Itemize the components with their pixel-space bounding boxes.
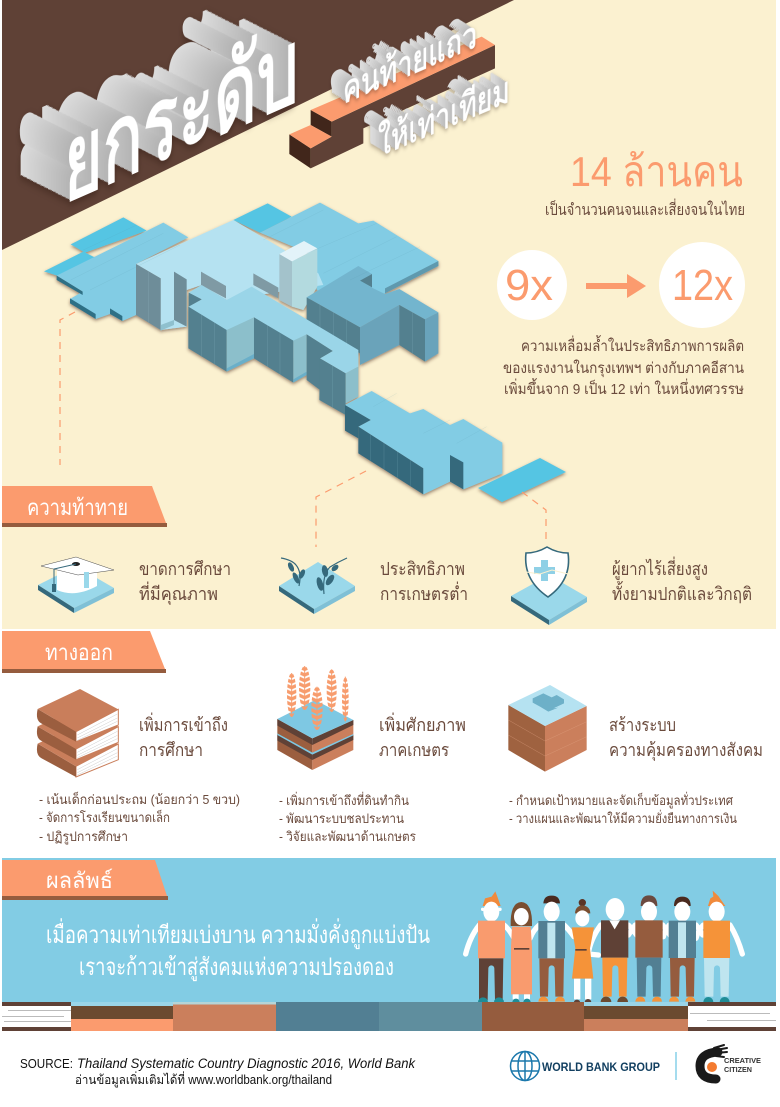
text: lack of quality education: ขาดการศึกษา (139, 559, 231, 579)
bullet list: agriculture: - เพิ่มการเข้าถึงที่ดินทำกิน (279, 792, 409, 808)
logo: World Bank Group: WORLD BANK GROUP (542, 1062, 660, 1074)
results statement: เมื่อความเท่าเทียมเบ่งบาน ความมั่งคั่งถูกแบ่งปัน (46, 918, 430, 950)
person 2 (511, 902, 532, 1002)
bullet list: social protection (509, 791, 737, 826)
bullet list: education (39, 790, 240, 845)
productivity gap text: เพิ่มขึ้นจาก 9 เป็น 12 เท่า ในหนึ่งทศวรรษ (504, 378, 744, 398)
text: increase access to education: เพิ่มการเข้าถึง (139, 712, 228, 735)
person 6 (635, 895, 663, 1002)
banner: challenges (2, 486, 167, 527)
circle: 9x (497, 250, 567, 320)
person 5 (601, 898, 628, 1002)
subtitle line 1, extruded: คนท้ายแถว (343, 13, 477, 113)
text: low agricultural productivity (380, 559, 468, 604)
person 8 (703, 891, 730, 1002)
results statement: เราจะก้าวเข้าสู่สังคมแห่งความปรองดอง (79, 954, 394, 982)
logo divider (676, 1052, 677, 1080)
brown diagonal title background (2, 0, 514, 250)
main title, extruded isometric text: ยกระดับ (64, 6, 299, 226)
bottom colour blocks (2, 1002, 776, 1031)
results panel background (2, 858, 776, 1003)
text: increase access to education: การศึกษา (139, 740, 203, 760)
bullet list: education: - เน้นเด็กก่อนประถม (น้อยกว่า 5 ขวบ) (39, 790, 240, 807)
banner: solutions: ทางออก (45, 640, 113, 665)
subtitle line 2, extruded: ให้เท่าเทียม (378, 68, 510, 166)
text: build social protection system: สร้างระบบ (609, 715, 676, 735)
text: lack of quality education: ที่มีคุณภาพ (139, 581, 218, 605)
source text: SOURCE: (20, 1056, 73, 1071)
bullet list: education: - ปฏิรูปการศึกษา (39, 829, 128, 845)
person 3 (538, 896, 565, 1002)
circle: 12x: 12x (672, 261, 733, 310)
circle: 9x: 9x (505, 261, 553, 310)
bullet list: social protection: - กำหนดเป้าหมายและจัดเก็บข้อมูลทั่วประเทศ (509, 791, 734, 809)
banner: results (2, 860, 168, 900)
logo: Creative Citizen: CREATIVE (724, 1056, 761, 1065)
circle: 12x (659, 242, 745, 328)
icon: cube with medical cross (508, 685, 587, 772)
banner: results: ผลลัพธ์ (46, 868, 113, 893)
source text (20, 1056, 416, 1088)
icon: graduation cap on platform (38, 557, 114, 613)
dashed connector: agriculture (316, 471, 366, 547)
text: lack of quality education (139, 559, 231, 605)
productivity gap text (503, 335, 744, 398)
source text: Thailand Systematic Country Diagnostic 2016, World Bank (77, 1056, 416, 1071)
text: increase agricultural potential: ภาคเกษตร (379, 740, 449, 760)
productivity gap text: ของแรงงานในกรุงเทพฯ ต่างกับภาคอีสาน (503, 359, 744, 378)
person 7 (669, 897, 696, 1002)
logo: Creative Citizen: CITIZEN (724, 1065, 752, 1074)
source text: อ่านข้อมูลเพิ่มเติมได้ที่ www.worldbank.org/thailand (75, 1071, 332, 1088)
icon: shield on platform (511, 547, 587, 625)
text: build social protection system (609, 715, 763, 761)
text: increase agricultural potential: เพิ่มศักยภาพ (379, 712, 466, 735)
statistic: 14 million people: 14 ล้านคน (570, 148, 743, 195)
text: increase agricultural potential (379, 712, 466, 760)
dashed connector: health (522, 492, 546, 542)
text: vulnerable in normal times and crisis (612, 556, 752, 604)
logo: Creative Citizen (700, 1045, 761, 1079)
icon: plants on platform (279, 558, 355, 614)
text: vulnerable in normal times and crisis: ผู้ยากไร้เสี่ยงสูง (612, 556, 708, 580)
cream background panel (2, 0, 776, 629)
banner: solutions (2, 631, 166, 673)
arrow from 9x to 12x (586, 274, 646, 298)
results statement (46, 918, 430, 982)
icon: stack of books (37, 689, 118, 777)
people group (466, 891, 742, 1003)
logo: World Bank Group (510, 1052, 660, 1080)
bullet list: education: - จัดการโรงเรียนขนาดเล็ก (39, 808, 170, 825)
person 4 (572, 899, 594, 1003)
person 1 (478, 891, 505, 1002)
productivity gap text: ความเหลื่อมล้ำในประสิทธิภาพการผลิต (521, 335, 744, 355)
isometric map of Thailand (44, 203, 566, 502)
stair graphic (289, 37, 495, 168)
text: vulnerable in normal times and crisis: ทั้งยามปกติและวิกฤติ (612, 581, 752, 604)
bullet list: agriculture (279, 792, 416, 844)
text: increase access to education (139, 712, 228, 760)
text: low agricultural productivity: การเกษตรต่ำ (380, 581, 468, 604)
dashed connector: education (60, 312, 75, 465)
bullet list: agriculture: - วิจัยและพัฒนาด้านเกษตร (279, 829, 416, 844)
bullet list: social protection: - วางแผนและพัฒนาให้มีความยั่งยืนทางการเงิน (509, 810, 737, 826)
banner: challenges: ความท้าทาย (27, 495, 128, 520)
icon: soil cube with wheat (277, 666, 353, 770)
text: low agricultural productivity: ประสิทธิภาพ (380, 559, 465, 579)
bullet list: agriculture: - พัฒนาระบบชลประทาน (279, 811, 404, 826)
